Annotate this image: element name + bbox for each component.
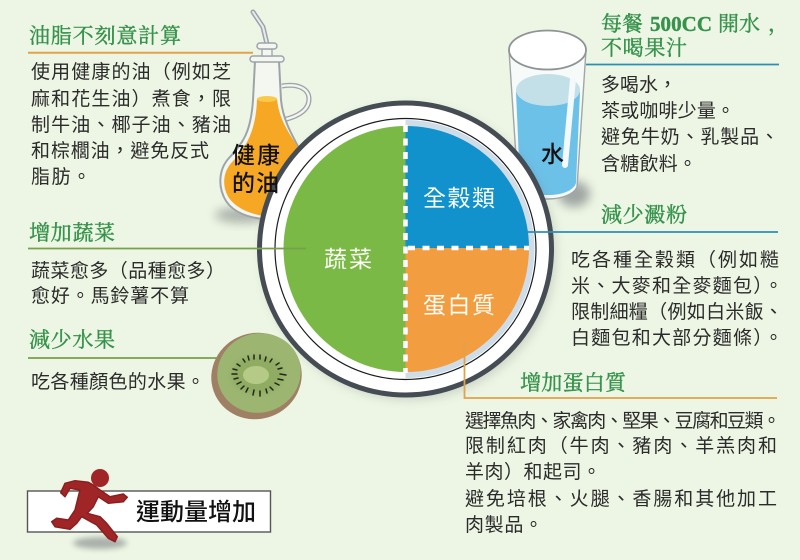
text block: vegetables [31, 260, 225, 307]
heading: protein: 增加蛋白質 [520, 371, 627, 395]
plate section: whole grains [406, 126, 529, 248]
heading: fruit: 減少水果 [29, 328, 115, 352]
icon: kiwi [199, 320, 314, 432]
text block: fats: 和棕櫚油，避免反式 [31, 140, 209, 162]
label: whole grains: 全穀類 [423, 185, 495, 211]
label: healthy oil line 2: 的油 [232, 170, 279, 196]
label: protein: 蛋白質 [423, 292, 495, 318]
heading: fats: 油脂不刻意計算 [29, 24, 181, 48]
heading: water: 500CC [650, 12, 712, 36]
exercise box [28, 491, 270, 532]
text block: protein: 避免培根、火腿、香腸和其他加工 [465, 488, 777, 510]
text block: starch [571, 249, 783, 349]
text block: fats: 麻和花生油）煮食，限 [31, 88, 231, 110]
text block: water: 多喝水， [601, 74, 677, 96]
text block: fats: 使用健康的油（例如芝 [31, 61, 231, 83]
text block: vegetables: 蔬菜愈多（品種愈多） [31, 260, 225, 282]
label: healthy oil: 健康 [232, 142, 280, 168]
text block: starch: 限制細糧（例如白米飯、 [571, 301, 783, 323]
heading: starch: 減少澱粉 [601, 203, 687, 227]
heading: water [586, 12, 789, 64]
heading: water: 不喝果汁 [601, 36, 687, 60]
heading: water: 開水 [718, 12, 760, 36]
text block: protein: 選擇魚肉、家禽肉、堅果、豆腐和豆類。 [465, 410, 781, 432]
text block: protein: 羊肉）和起司。 [465, 461, 601, 483]
heading: water: ， [768, 12, 789, 37]
heading: protein [464, 340, 777, 398]
text block: protein [465, 410, 781, 536]
text block: water: 含糖飲料。 [601, 153, 697, 175]
text block: protein: 肉製品。 [465, 514, 543, 536]
text block: vegetables: 愈好。馬鈴薯不算 [31, 285, 189, 307]
text block: water: 避免牛奶、乳製品、 [601, 126, 779, 148]
icon: water glass [509, 30, 590, 207]
heading: vegetables: 增加蔬菜 [29, 221, 115, 245]
heading: water: 每餐 [601, 12, 643, 36]
text block: starch: 白麵包和大部分麵條）。 [571, 327, 783, 349]
text block: water: 茶或咖啡少量。 [601, 100, 735, 122]
text block: starch: 米、大麥和全麥麵包）。 [571, 275, 783, 297]
icon: oil bottle [215, 12, 309, 223]
text block: fats [31, 61, 231, 188]
text block: fats: 制牛油、椰子油、豬油 [31, 114, 231, 136]
label: vegetables: 蔬菜 [324, 246, 372, 272]
text block: protein: 限制紅肉（牛肉、豬肉、羊羔肉和 [465, 435, 777, 457]
text block: fats: 脂肪。 [31, 166, 91, 188]
plate section: vegetables [283, 126, 406, 372]
text block: water [601, 74, 779, 175]
text block: starch: 吃各種全穀類（例如糙 [571, 249, 779, 271]
label: water: 水 [541, 141, 564, 167]
text block: fruit: 吃各種顏色的水果。 [31, 371, 205, 393]
icon: runner [52, 469, 127, 549]
plate section: protein [406, 248, 529, 372]
plate [260, 103, 556, 400]
exercise box: 運動量增加 [136, 499, 256, 526]
